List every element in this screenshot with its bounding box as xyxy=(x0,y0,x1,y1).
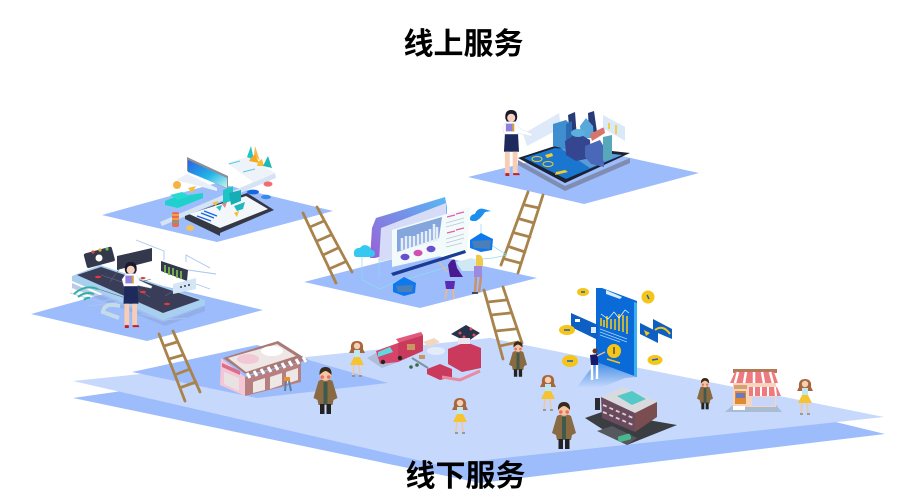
illustration: cloud data screen scene xyxy=(354,197,507,299)
panel: offline base lower plate xyxy=(73,338,885,483)
illustration: pink store xyxy=(220,341,308,396)
figure: presenter woman lower left xyxy=(122,262,152,328)
figure: girl front left xyxy=(452,398,468,433)
figure: girl far right xyxy=(797,379,813,414)
illustration: smart device scene xyxy=(70,240,216,328)
illustration: smart city scene xyxy=(502,110,630,191)
figure: big man center xyxy=(552,402,576,449)
figure: man pointing at phone xyxy=(590,348,605,380)
figure: girl near truck xyxy=(349,341,365,376)
panel: offline base upper plate xyxy=(73,338,884,465)
panel: lower left plate xyxy=(31,282,263,341)
figure: presenter woman top right xyxy=(502,110,533,176)
arrow: ladder store to lower left xyxy=(159,331,200,401)
illustration: data dashboard scene xyxy=(160,146,276,236)
figure: small man right xyxy=(697,378,713,409)
arrow: ladder base to middle xyxy=(484,287,522,359)
figure: man near ladder xyxy=(509,342,527,377)
illustration: finance phone scene xyxy=(559,288,672,388)
figure: man near store xyxy=(314,367,338,414)
panel: store plate xyxy=(132,345,388,398)
title: offline services: 线下服务 xyxy=(406,460,526,493)
illustration: hotel building block xyxy=(585,387,677,445)
panel: middle plate xyxy=(304,252,537,308)
illustration: shop with striped awning xyxy=(725,369,782,412)
arrow: ladder upper left to middle xyxy=(303,207,352,283)
figure: girl center xyxy=(540,375,556,410)
title: online services: 线上服务 xyxy=(404,28,524,61)
panel: top right plate xyxy=(468,148,699,204)
panel: upper left plate xyxy=(102,183,333,242)
illustration: delivery truck and factory xyxy=(367,325,481,380)
arrow: ladder middle to top right xyxy=(501,192,543,273)
figure: two women at the screen xyxy=(439,255,483,299)
